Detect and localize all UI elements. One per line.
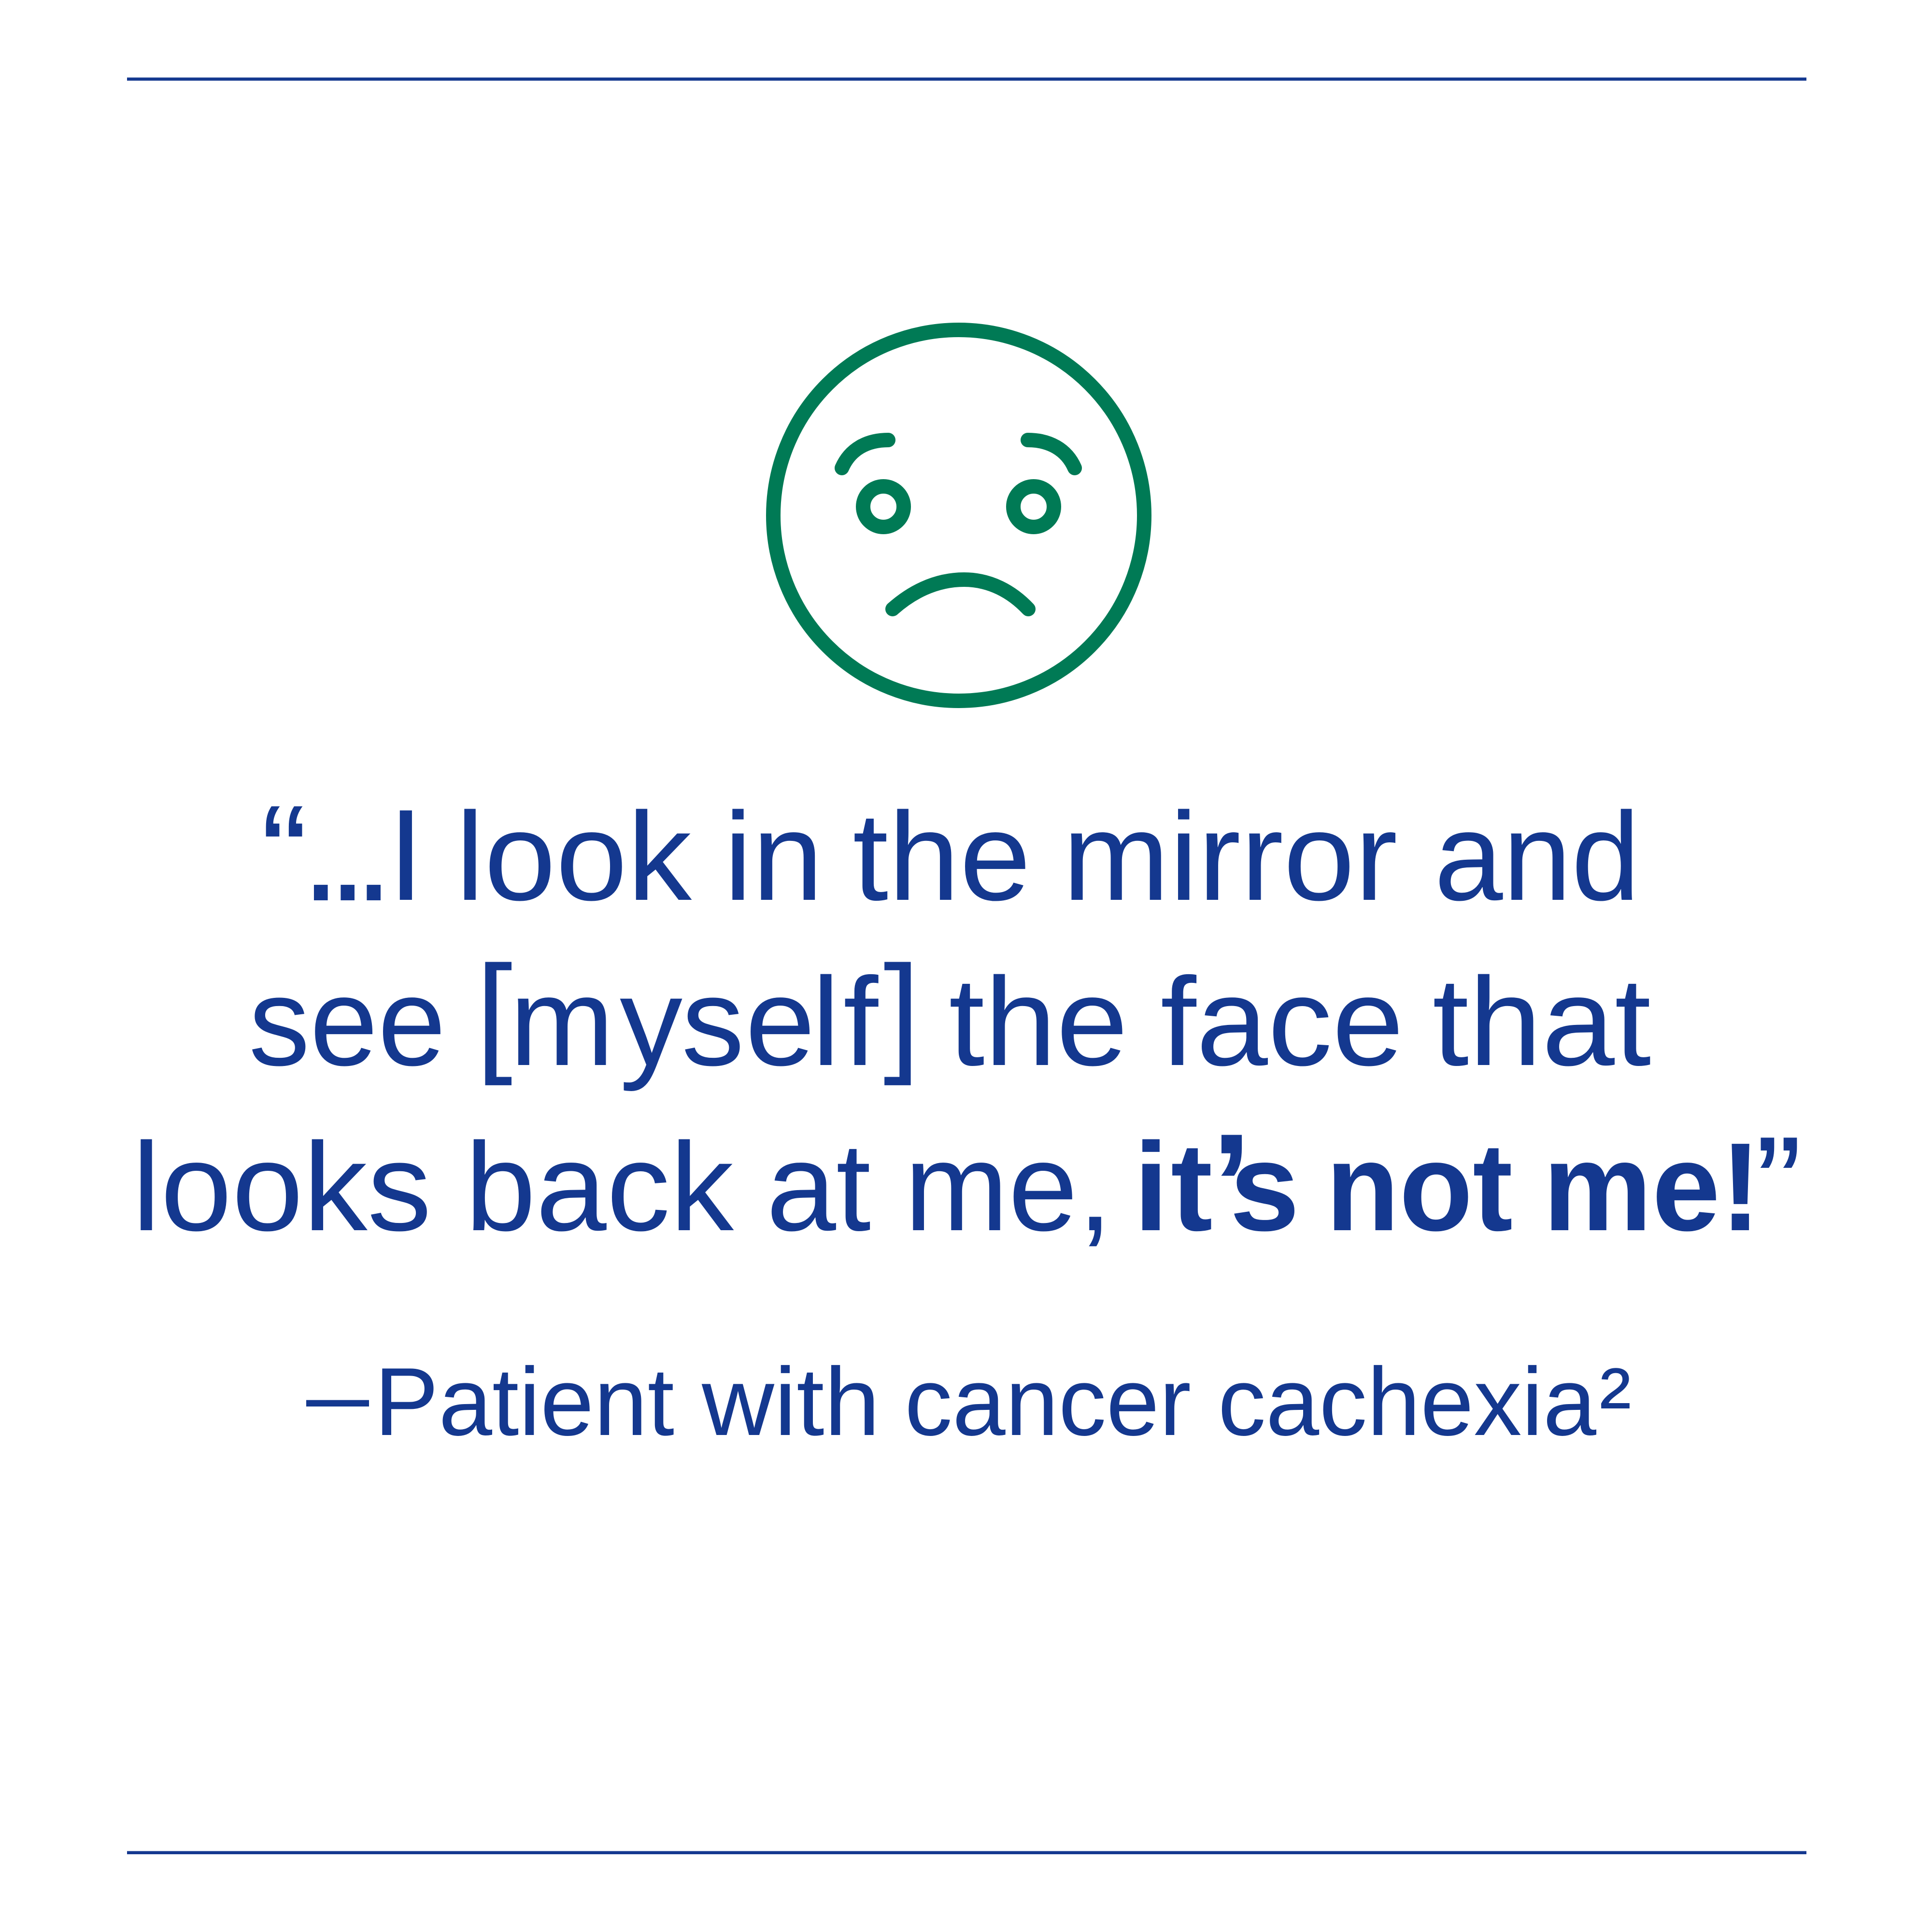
quote line 1: mirror xyxy=(1063,787,1397,927)
attribution: ² xyxy=(1599,1348,1632,1456)
quote line 3 xyxy=(132,1103,1802,1265)
right eye xyxy=(1013,486,1054,527)
quote line 2: ] xyxy=(883,938,920,1087)
quote line 3: s xyxy=(1230,1117,1300,1257)
quote line 3: at xyxy=(767,1117,871,1257)
bottom rule xyxy=(127,1851,1806,1854)
quote line 1: I xyxy=(388,782,424,928)
attribution: with xyxy=(701,1348,880,1456)
quote line 2: face xyxy=(1161,952,1404,1092)
quote line 1: “ xyxy=(261,778,308,928)
quote line 3: me, xyxy=(904,1117,1112,1257)
quote line 2: myself xyxy=(510,952,879,1093)
left eyebrow xyxy=(842,440,888,468)
icon: sad face xyxy=(773,330,1144,701)
quote line 3: ” xyxy=(1755,1109,1802,1260)
quote line 1 xyxy=(261,769,1640,931)
attribution: cancer xyxy=(905,1348,1191,1456)
quote line 1: ... xyxy=(301,769,394,931)
attribution: — xyxy=(306,1341,369,1449)
right eyebrow xyxy=(1028,440,1075,468)
quote line 3: it xyxy=(1134,1117,1213,1257)
quote line 2: that xyxy=(1433,952,1651,1092)
quote line 3: back xyxy=(465,1117,736,1257)
quote line 2: [ xyxy=(476,938,513,1087)
quote line 2: the xyxy=(949,952,1128,1092)
quote line 3: me! xyxy=(1543,1117,1761,1257)
quote line 1: and xyxy=(1435,787,1640,927)
frowning mouth xyxy=(893,580,1028,609)
quote line 3: looks xyxy=(132,1117,431,1257)
top rule xyxy=(127,77,1806,81)
quote line 2: see xyxy=(249,952,446,1092)
quote line 3: ’ xyxy=(1211,1103,1251,1265)
quote text xyxy=(132,769,1802,1265)
attribution: cachexia xyxy=(1218,1348,1597,1456)
quote line 2 xyxy=(249,938,1651,1093)
quote line 1: in xyxy=(724,787,823,927)
left eye xyxy=(863,486,904,527)
quote line 3: not xyxy=(1326,1117,1513,1257)
quote line 1: the xyxy=(852,787,1031,927)
attribution xyxy=(306,1341,1632,1456)
attribution: Patient xyxy=(374,1348,674,1456)
quote line 1: look xyxy=(455,787,694,927)
face outline xyxy=(773,330,1144,701)
